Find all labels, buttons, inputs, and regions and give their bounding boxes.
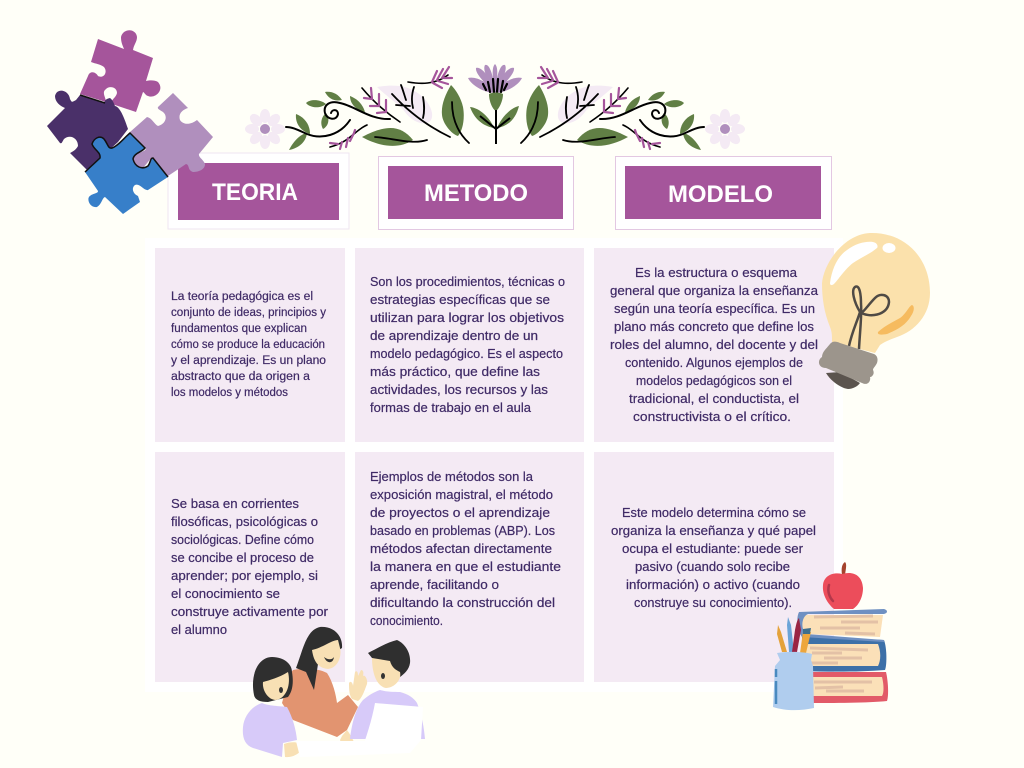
text: metodo details: aprende, facilitando o [370,578,499,592]
icon: pencil jar [773,617,814,710]
text: teoria definition: abstracto que da origen a [171,371,311,383]
text: modelo definition: general que organiza la enseñanza [610,284,818,298]
panel: modelo details [594,452,834,682]
text: metodo details: basado en problemas (ABP). Los [370,524,555,538]
text: teoria definition: conjunto de ideas, principios y [171,307,326,319]
text: metodo details: la manera en que el estudiante [370,560,561,574]
text: teoria definition: La teoría pedagógica es el [171,291,313,303]
text: modelo definition: modelos pedagógicos son el [636,374,792,388]
text: modelo definition: contenido. Algunos ejemplos de [625,356,803,370]
text: modelo definition: plano más concreto que define los [614,320,814,334]
text: modelo definition: constructivista o el crítico. [633,410,791,424]
text: modelo details [611,506,816,610]
text: metodo details: Ejemplos de métodos son la [370,470,533,484]
icon: central flower [468,64,522,144]
text: metodo definition: formas de trabajo en el aula [370,401,531,415]
heading: modelo: MODELO [668,181,773,208]
text: metodo definition [370,275,565,415]
text: teoria details: construye activamente por [171,605,328,619]
text: teoria details: aprender; por ejemplo, si [171,569,318,583]
text: metodo details: métodos afectan directamente [370,542,552,556]
text: teoria definition: fundamentos que explican [171,323,307,335]
panel: teoria definition [155,248,345,442]
figure: girl student [243,657,303,757]
text: teoria definition: cómo se produce la educación [171,339,325,351]
heading: teoria: TEORIA [212,179,298,206]
floral garland [245,64,745,150]
heading: metodo [378,156,574,230]
heading: metodo: METODO [424,180,528,207]
heading: modelo [616,156,832,230]
white table panel [145,238,843,692]
text: metodo definition: de aprendizaje dentro de un [370,329,538,343]
panel: teoria details [155,452,345,682]
text: teoria details: se concibe el proceso de [171,551,314,565]
icon: puzzle pieces [47,30,213,214]
text: modelo details: Este modelo determina cómo se [622,506,806,520]
text: modelo details: ocupa el estudiante: puede ser [622,542,803,556]
text: metodo definition: más práctico, que define las [370,365,540,379]
text: modelo definition: Es la estructura o esquema [635,266,797,280]
heading: teoria [168,153,349,229]
text: modelo details: organiza la enseñanza y qué papel [611,524,816,538]
text: teoria definition: los modelos y métodos [171,387,288,399]
text: modelo definition [610,266,818,424]
text: metodo definition: modelo pedagógico. Es el aspecto [370,347,563,361]
text: modelo definition: roles del alumno, del docente y del [610,338,818,352]
text: teoria details: Se basa en corrientes [171,497,299,511]
icon: stacked books [797,609,888,703]
text: metodo details: exposición magistral, el método [370,488,553,502]
text: teoria definition: y el aprendizaje. Es un plano [171,355,326,367]
icon: apple [823,562,863,609]
text: metodo definition: actividades, los recursos y las [370,383,548,397]
text: modelo details: pasivo (cuando solo recibe [635,560,790,574]
panel: metodo details [355,452,584,682]
text: teoria details: sociológicas. Define cómo [171,533,314,547]
icon: light bulb [819,233,930,389]
text: teoria details: el alumno [171,623,227,637]
text: metodo details: dificultando la construcción del [370,596,555,610]
text: modelo definition: según una teoría específica. Es un [614,302,815,316]
text: teoria details: el conocimiento se [171,587,280,601]
text: metodo definition: utilizan para lograr los objetivos [370,311,564,325]
panel: modelo definition [594,248,834,442]
text: metodo details [370,470,561,628]
figure: teacher [282,627,367,752]
text: teoria details: filosóficas, psicológicas o [171,515,318,529]
text: modelo definition: tradicional, el conductista, el [629,392,799,406]
text: metodo details: conocimiento. [370,614,443,628]
text: metodo details: de proyectos o el aprendizaje [370,506,550,520]
figure: boy student [296,640,425,757]
text: metodo definition: estrategias específicas que se [370,293,550,307]
text: teoria details [171,497,328,637]
text: modelo details: información) o activo (cuando [626,578,800,592]
text: modelo details: construye su conocimiento). [634,596,792,610]
text: metodo definition: Son los procedimientos, técnicas o [370,275,565,289]
text: teoria definition [171,291,326,399]
illustration: teacher and students [243,627,425,757]
panel: metodo definition [355,248,584,442]
